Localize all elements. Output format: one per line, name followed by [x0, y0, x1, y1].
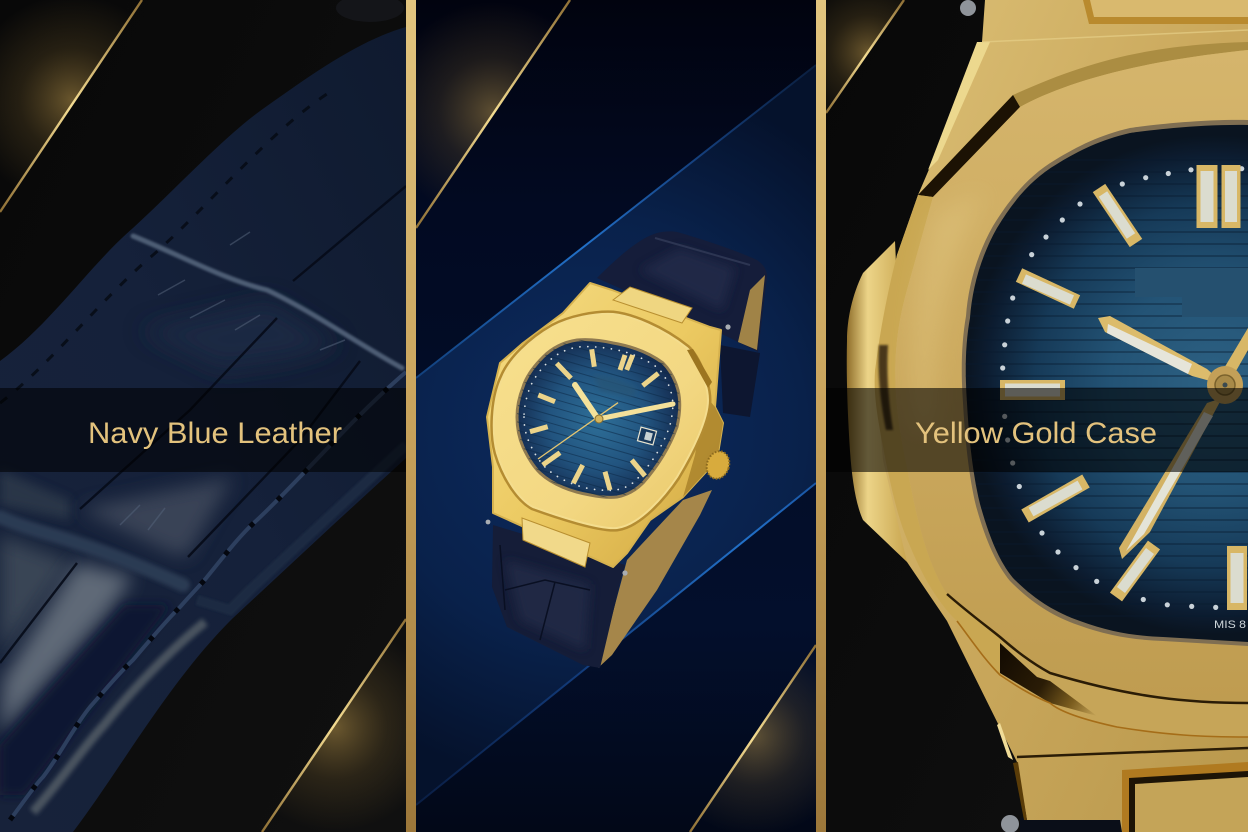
deep panel	[0, 605, 170, 795]
top bracelet link	[1083, 0, 1248, 24]
date window	[637, 427, 657, 445]
bottom gold diagonal line	[690, 645, 816, 832]
crown guard	[847, 241, 907, 562]
polished reflection left	[878, 345, 893, 430]
minute hand	[598, 404, 673, 419]
label band: navy blue leather	[0, 388, 406, 472]
minute track dots	[1000, 166, 1244, 610]
second hand	[1220, 328, 1248, 378]
bottom bar link	[522, 518, 590, 567]
bezel chamfer top	[918, 42, 1248, 197]
second hand	[538, 403, 618, 459]
bezel	[494, 314, 708, 528]
watch case	[487, 283, 723, 567]
divider right	[816, 0, 826, 832]
lower strap	[492, 525, 625, 668]
bezel highlight	[913, 190, 985, 430]
dial small text: MIS 8	[1214, 619, 1246, 631]
top gold diagonal line	[416, 0, 570, 228]
diagonal blue band	[416, 65, 816, 805]
dial stripes	[474, 313, 727, 520]
minute hand	[1119, 398, 1222, 559]
upper leather ridge	[133, 236, 402, 368]
top bar link	[613, 287, 692, 323]
black polished facet top	[918, 95, 1020, 197]
upper lit panel streaks	[180, 308, 316, 360]
lug highlight edge	[928, 42, 990, 170]
logo smudge	[593, 375, 636, 397]
center hub	[1207, 366, 1243, 404]
lower leather ridge	[0, 517, 183, 585]
lug edge highlight	[997, 723, 1013, 760]
case body	[875, 0, 1248, 832]
label text: navy blue leather: Navy Blue Leather	[88, 417, 342, 450]
hour hand	[575, 385, 598, 419]
strap keeper	[720, 345, 760, 417]
main lit panel	[0, 563, 133, 733]
bezel lower band	[1000, 637, 1248, 737]
lower case edge	[1017, 748, 1248, 757]
welt highlight	[33, 622, 205, 812]
upper strap	[597, 231, 767, 352]
panel: watch hero	[416, 0, 816, 832]
hour markers luminous inlay	[1005, 171, 1237, 603]
hour markers gold frames	[1000, 165, 1237, 610]
lower strap lining	[598, 490, 712, 668]
logo redaction	[1135, 268, 1248, 317]
panel: navy blue leather	[0, 0, 406, 832]
hand hub	[595, 415, 603, 423]
upper stitching	[0, 90, 333, 403]
polished facet	[687, 349, 712, 388]
leather grain streaks	[120, 232, 345, 530]
screw bottom	[622, 570, 628, 576]
left lit panel	[0, 535, 72, 655]
top gold diagonal line	[826, 0, 904, 113]
crown	[703, 448, 733, 482]
dial	[517, 340, 680, 497]
hour hand	[1098, 316, 1225, 385]
bezel lower gold line	[957, 621, 1248, 737]
leather strap close-up	[0, 27, 406, 832]
minute track dots	[524, 347, 673, 490]
upper strap lining	[738, 275, 765, 350]
right case shadow	[683, 395, 723, 497]
lug edge shadow	[1013, 762, 1027, 820]
lower stitching rope	[10, 372, 406, 820]
stitch holes	[10, 372, 406, 820]
bottom bracelet link	[1122, 762, 1248, 832]
bottom screw	[1001, 815, 1019, 832]
black polished facet bottom	[1000, 643, 1097, 716]
leather creases	[0, 186, 406, 663]
panel: yellow gold case	[826, 0, 1248, 832]
bezel outer shadow	[494, 314, 708, 528]
watch	[474, 231, 767, 668]
dial	[966, 125, 1248, 642]
strap detail layer	[0, 90, 406, 820]
bottom strap strip	[1020, 818, 1124, 832]
top lug step	[982, 30, 1248, 42]
label text: yellow gold case: Yellow Gold Case	[915, 417, 1157, 450]
welt upper segment	[197, 472, 383, 614]
screw top	[725, 324, 731, 330]
screw left	[486, 520, 490, 524]
hour markers	[530, 349, 658, 490]
strap top shadow object	[336, 0, 404, 22]
bezel flat	[895, 50, 1248, 703]
bezel side left	[875, 195, 1000, 675]
dial stripes	[960, 160, 1248, 616]
top screw	[960, 0, 976, 16]
bottom gold diagonal line	[262, 619, 406, 832]
dial glass ring	[962, 120, 1248, 646]
bezel lower dark line	[947, 594, 1248, 703]
top gold diagonal line	[0, 0, 142, 212]
divider left	[406, 0, 416, 832]
label band: yellow gold case	[826, 388, 1248, 472]
patch above lower ridge	[80, 477, 233, 557]
